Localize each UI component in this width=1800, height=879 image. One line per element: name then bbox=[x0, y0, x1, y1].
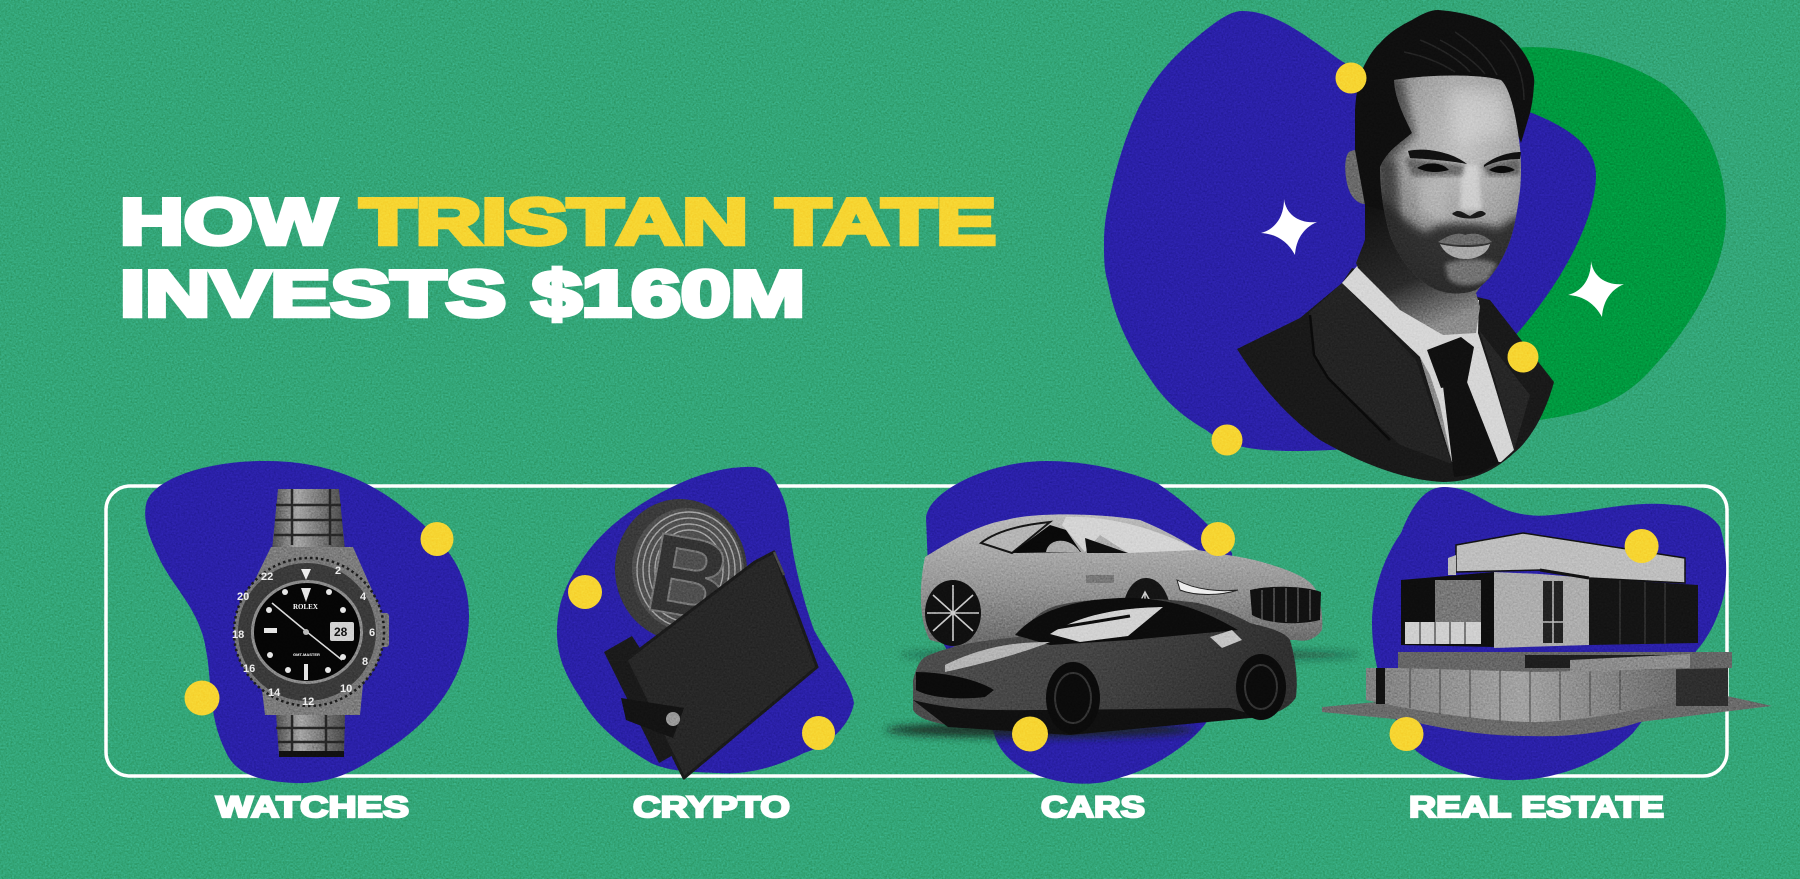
portrait of man in suit bbox=[1237, 10, 1554, 482]
pillar and middle bbox=[1494, 572, 1589, 648]
title bbox=[120, 185, 996, 330]
title: TATE bbox=[776, 185, 996, 258]
right wing bbox=[1676, 658, 1728, 706]
chin bbox=[1445, 260, 1497, 285]
grille bbox=[1250, 587, 1321, 623]
wheels bbox=[1046, 662, 1100, 734]
hair bbox=[1355, 10, 1534, 215]
title: HOW bbox=[120, 185, 337, 258]
crown bbox=[378, 613, 389, 647]
headlight bbox=[1177, 580, 1238, 594]
blue blob bbox=[1372, 487, 1726, 780]
icon: bitcoin coin: B bbox=[638, 509, 740, 646]
middle base bbox=[1398, 652, 1732, 672]
dark box bbox=[1401, 572, 1494, 647]
face bbox=[1380, 76, 1521, 294]
mirror bbox=[1046, 541, 1080, 552]
label: cars: CARS bbox=[1041, 791, 1145, 824]
blue blob bbox=[557, 467, 854, 773]
dots bbox=[1212, 62, 1538, 456]
silver car bbox=[921, 514, 1322, 648]
window bbox=[1543, 581, 1563, 643]
icon: modern house bbox=[1322, 533, 1772, 736]
icon: wristwatch: 4 bbox=[360, 591, 367, 603]
watch labels: ROLEX bbox=[293, 603, 318, 611]
dots bbox=[184, 522, 454, 716]
icon: wristwatch: 20 bbox=[237, 591, 249, 603]
dots bbox=[1390, 529, 1659, 751]
hair strands bbox=[1404, 32, 1524, 100]
rear wheel bbox=[925, 580, 981, 646]
blue blob bbox=[1104, 11, 1596, 451]
icon: wristwatch: 22 bbox=[261, 571, 273, 583]
ground plate bbox=[1322, 690, 1772, 736]
watch labels: GMT-MASTER bbox=[293, 652, 320, 657]
eye shadow bbox=[1405, 158, 1520, 176]
ear bbox=[1345, 150, 1372, 204]
dial bbox=[254, 583, 360, 681]
cheek shadow bbox=[1378, 160, 1400, 222]
facial shading bbox=[1380, 78, 1521, 294]
title: TRISTAN bbox=[360, 185, 748, 258]
panel: cars bbox=[885, 461, 1360, 784]
icon: bitcoin coin bbox=[608, 492, 754, 648]
nose bbox=[1452, 211, 1486, 218]
suit jacket bbox=[1237, 268, 1554, 482]
icon: wristwatch: 14 bbox=[268, 687, 281, 699]
wallet button bbox=[666, 712, 680, 726]
panel: crypto bbox=[557, 467, 854, 778]
sparkle bbox=[1261, 199, 1317, 255]
icon: wristwatch: 10 bbox=[340, 683, 352, 695]
upper block bbox=[1456, 533, 1685, 583]
right panels bbox=[1589, 578, 1698, 645]
tie bbox=[1427, 337, 1499, 477]
panel: real estate bbox=[1322, 487, 1772, 780]
icon: wallet bbox=[604, 552, 817, 778]
icon: wristwatch: 6 bbox=[369, 627, 375, 639]
watch labels: 28 bbox=[334, 625, 348, 639]
case bbox=[234, 558, 384, 706]
title: $160M bbox=[532, 257, 805, 330]
eyebrows bbox=[1408, 150, 1521, 167]
label: watches: WATCHES bbox=[216, 791, 409, 824]
dark car bbox=[913, 598, 1297, 735]
hood highlight bbox=[945, 642, 1050, 672]
icon: wristwatch: 18 bbox=[232, 629, 244, 641]
icon: wristwatch: 8 bbox=[362, 656, 368, 668]
icon: wristwatch bbox=[232, 489, 389, 757]
beard bbox=[1382, 198, 1517, 294]
green blob bbox=[1400, 47, 1726, 420]
frame bbox=[106, 486, 1727, 776]
windows bbox=[981, 522, 1050, 553]
title: INVESTS bbox=[120, 257, 506, 330]
nose highlight bbox=[1460, 165, 1482, 210]
grille bbox=[916, 672, 994, 698]
car shadows bbox=[885, 649, 1360, 738]
dots bbox=[568, 575, 835, 750]
lower shadow bbox=[913, 700, 1261, 735]
watch labels bbox=[293, 603, 348, 657]
forehead highlight bbox=[1450, 90, 1510, 140]
blue blob bbox=[145, 461, 469, 783]
icon: wristwatch: 2 bbox=[335, 565, 341, 577]
eyes bbox=[1417, 163, 1515, 173]
side vent bbox=[1086, 575, 1114, 583]
lips bbox=[1438, 234, 1492, 245]
bracelet bbox=[272, 489, 345, 550]
label: crypto: CRYPTO bbox=[633, 791, 790, 824]
panel: portrait bbox=[1104, 10, 1726, 482]
sparkle bbox=[1568, 261, 1624, 317]
lugs bbox=[250, 547, 372, 715]
fade at temple bbox=[1380, 78, 1416, 170]
cheek highlight bbox=[1419, 182, 1444, 218]
front wheel bbox=[1122, 578, 1172, 620]
icon: wristwatch: 16 bbox=[243, 663, 255, 675]
label: real estate: REAL ESTATE bbox=[1409, 791, 1664, 824]
shirt bbox=[1342, 265, 1514, 462]
lower wall bbox=[1366, 668, 1676, 722]
blue blob bbox=[926, 461, 1240, 784]
dots bbox=[1012, 522, 1235, 752]
panel: watches bbox=[145, 461, 469, 783]
windows bbox=[1015, 598, 1238, 645]
watch hands bbox=[272, 603, 342, 660]
icon: wristwatch: 12 bbox=[302, 696, 314, 708]
neck bbox=[1356, 200, 1500, 335]
